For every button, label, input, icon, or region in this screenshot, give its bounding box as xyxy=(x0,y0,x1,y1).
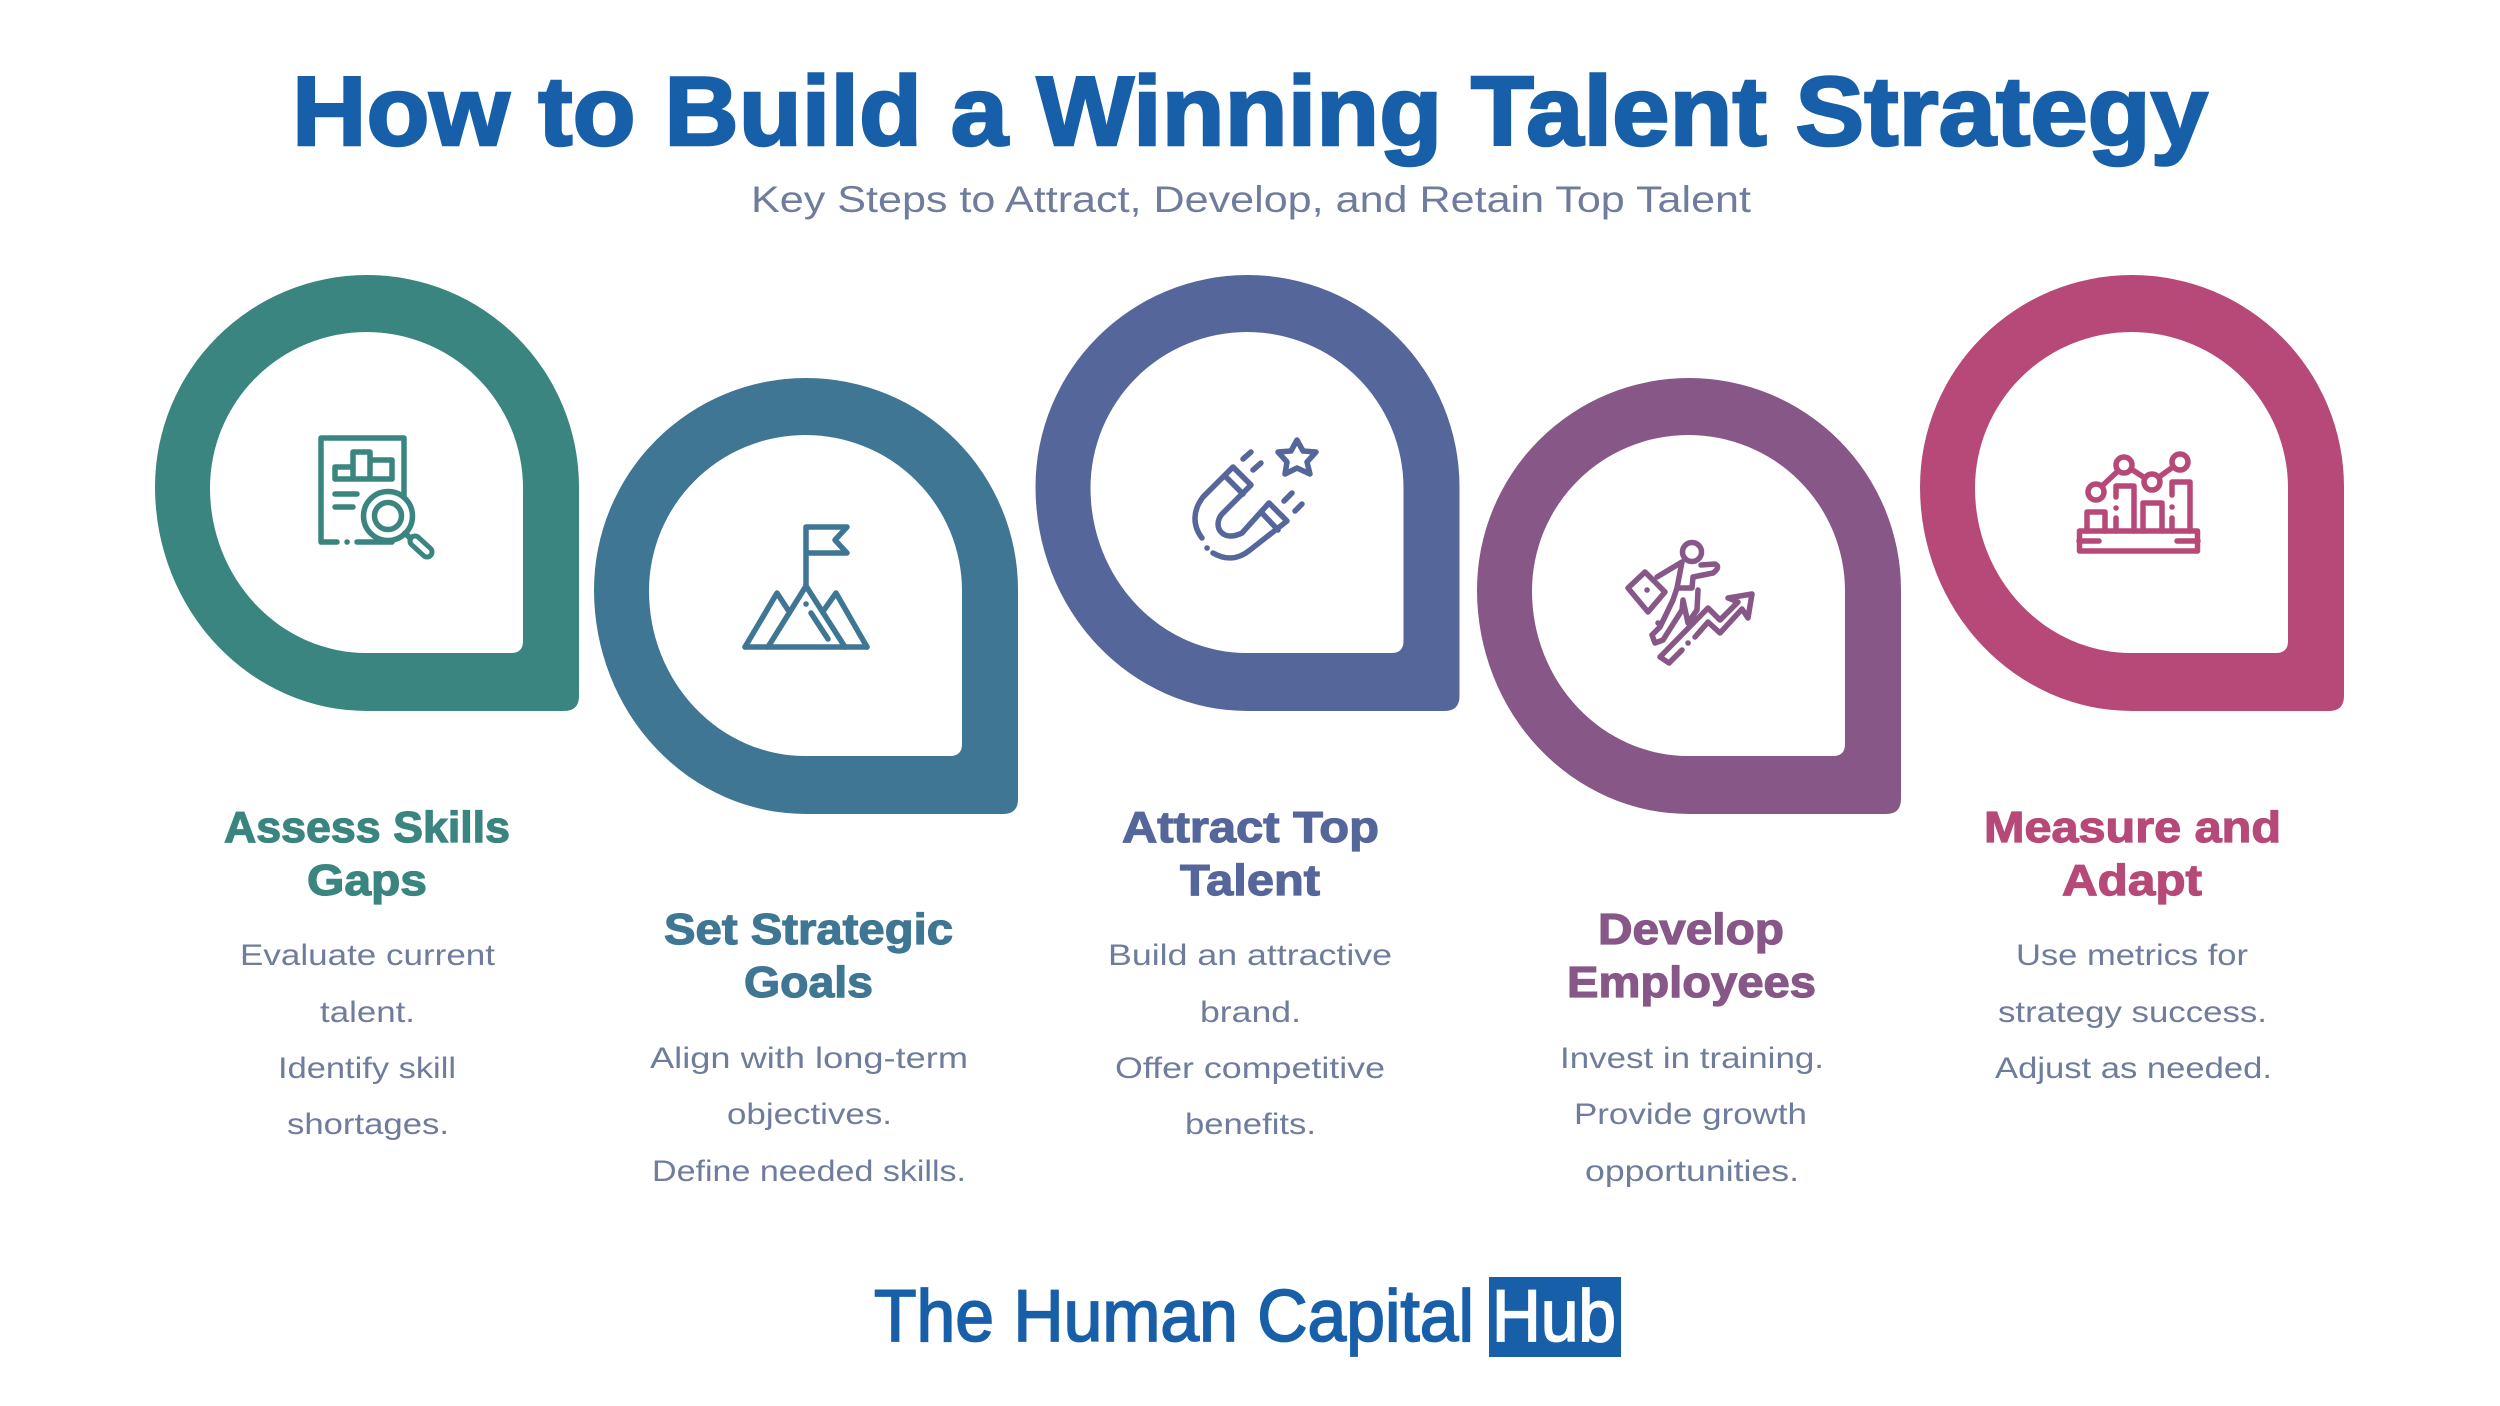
logo badge xyxy=(1489,1277,1621,1357)
heading: Develop xyxy=(1598,905,1784,954)
icon: report with magnifier xyxy=(321,438,427,552)
teardrop ring 3 xyxy=(1036,275,1460,711)
heading: Goals xyxy=(744,958,873,1007)
heading xyxy=(664,905,953,1007)
icon: bar chart with trend line xyxy=(2079,454,2198,551)
heading: Attract Top xyxy=(1122,803,1379,852)
heading: Adapt xyxy=(2062,856,2202,905)
panel: set strategic goals xyxy=(594,378,1018,1188)
title: How to Build a Winning Talent Strategy xyxy=(292,56,2208,166)
description: Define needed skills. xyxy=(652,1155,966,1188)
logo: Hub xyxy=(1492,1276,1616,1357)
teardrop ring 1 xyxy=(155,275,579,711)
heading xyxy=(1122,803,1379,905)
description: Evaluate current xyxy=(240,939,496,972)
description: opportunities. xyxy=(1585,1155,1799,1188)
heading: Assess Skills xyxy=(224,803,510,852)
heading: Set Strategic xyxy=(664,905,953,954)
heading: Measure and xyxy=(1984,803,2281,852)
panel: measure and adapt xyxy=(1920,275,2344,1085)
panel: develop employees xyxy=(1477,378,1901,1188)
heading xyxy=(1567,905,1816,1007)
logo: The Human Capital xyxy=(874,1276,1474,1357)
heading xyxy=(224,803,510,905)
description: Align with long-term xyxy=(650,1042,968,1075)
heading: Talent xyxy=(1180,856,1320,905)
description: strategy success. xyxy=(1998,996,2267,1029)
heading: Gaps xyxy=(307,856,427,905)
icon: climbing person with arrow xyxy=(1628,542,1752,663)
description: benefits. xyxy=(1185,1108,1316,1141)
description: Identify skill xyxy=(278,1052,456,1085)
description: brand. xyxy=(1200,996,1301,1029)
icon: mountain with flag xyxy=(745,527,867,647)
description: shortages. xyxy=(287,1108,449,1141)
teardrop ring 2 xyxy=(594,378,1018,814)
icon: magnet and star xyxy=(1195,440,1316,558)
description xyxy=(1995,939,2272,1085)
description: Offer competitive xyxy=(1115,1052,1385,1085)
description xyxy=(1108,939,1392,1141)
teardrop ring 5 xyxy=(1920,275,2344,711)
description: Provide growth xyxy=(1574,1098,1807,1131)
panel: assess skills gaps xyxy=(155,275,579,1141)
description xyxy=(650,1042,968,1188)
description: talent. xyxy=(320,996,415,1029)
description xyxy=(240,939,496,1141)
heading xyxy=(1984,803,2281,905)
panel: attract top talent xyxy=(1036,275,1460,1141)
description: Use metrics for xyxy=(2016,939,2248,972)
description xyxy=(1560,1042,1824,1188)
description: Build an attractive xyxy=(1108,939,1392,972)
description: Invest in training. xyxy=(1560,1042,1824,1075)
subtitle: Key Steps to Attract, Develop, and Retain Top Talent xyxy=(751,179,1752,220)
description: objectives. xyxy=(727,1098,892,1131)
heading: Employees xyxy=(1567,958,1816,1007)
description: Adjust as needed. xyxy=(1995,1052,2272,1085)
teardrop ring 4 xyxy=(1477,378,1901,814)
